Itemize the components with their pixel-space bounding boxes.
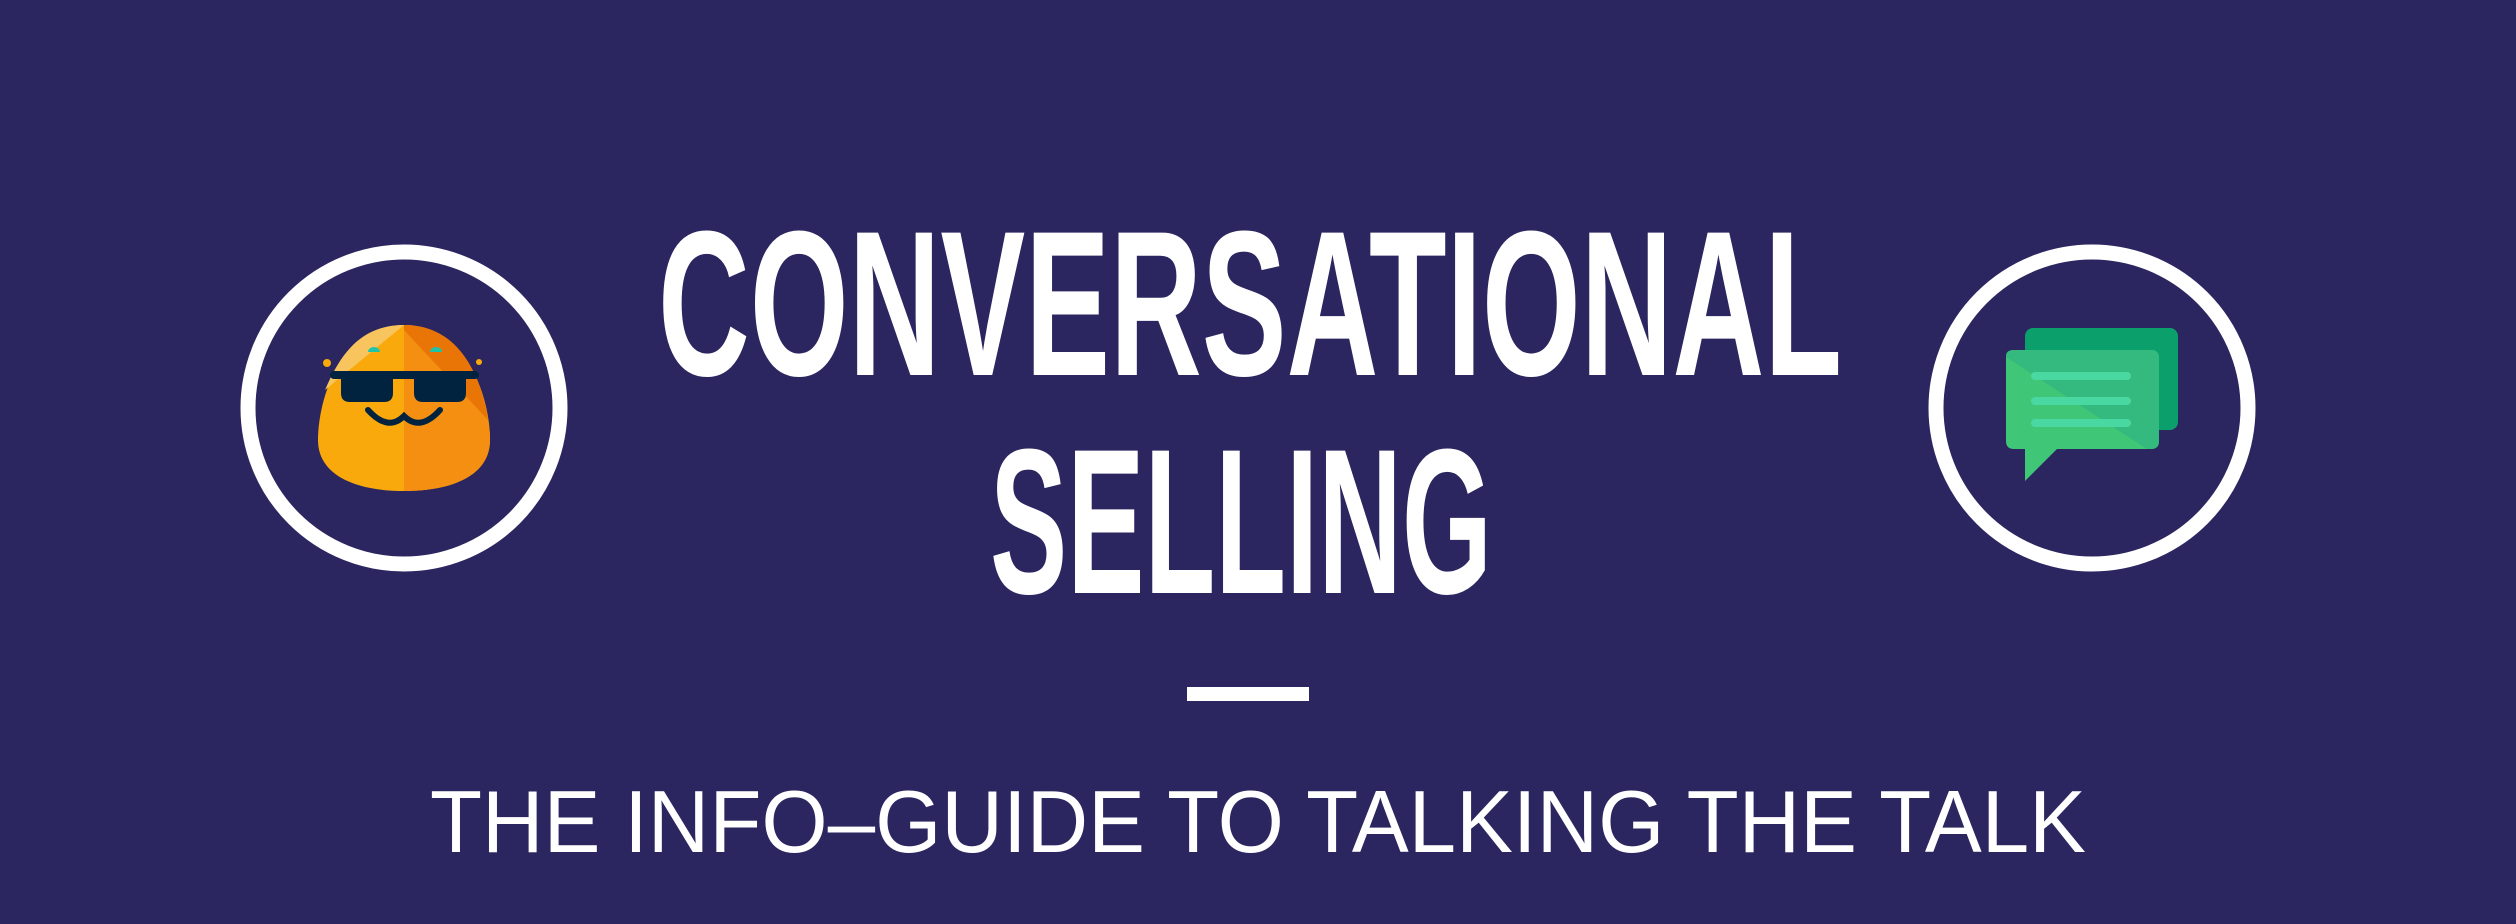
icon: cool emoji in circle	[248, 252, 560, 564]
divider dash	[1187, 687, 1309, 701]
subtitle: THE INFO–GUIDE TO TALKING THE TALK	[430, 772, 2086, 871]
title	[658, 188, 1842, 637]
title: SELLING	[990, 406, 1492, 637]
icon: chat bubbles in circle	[1936, 252, 2248, 564]
